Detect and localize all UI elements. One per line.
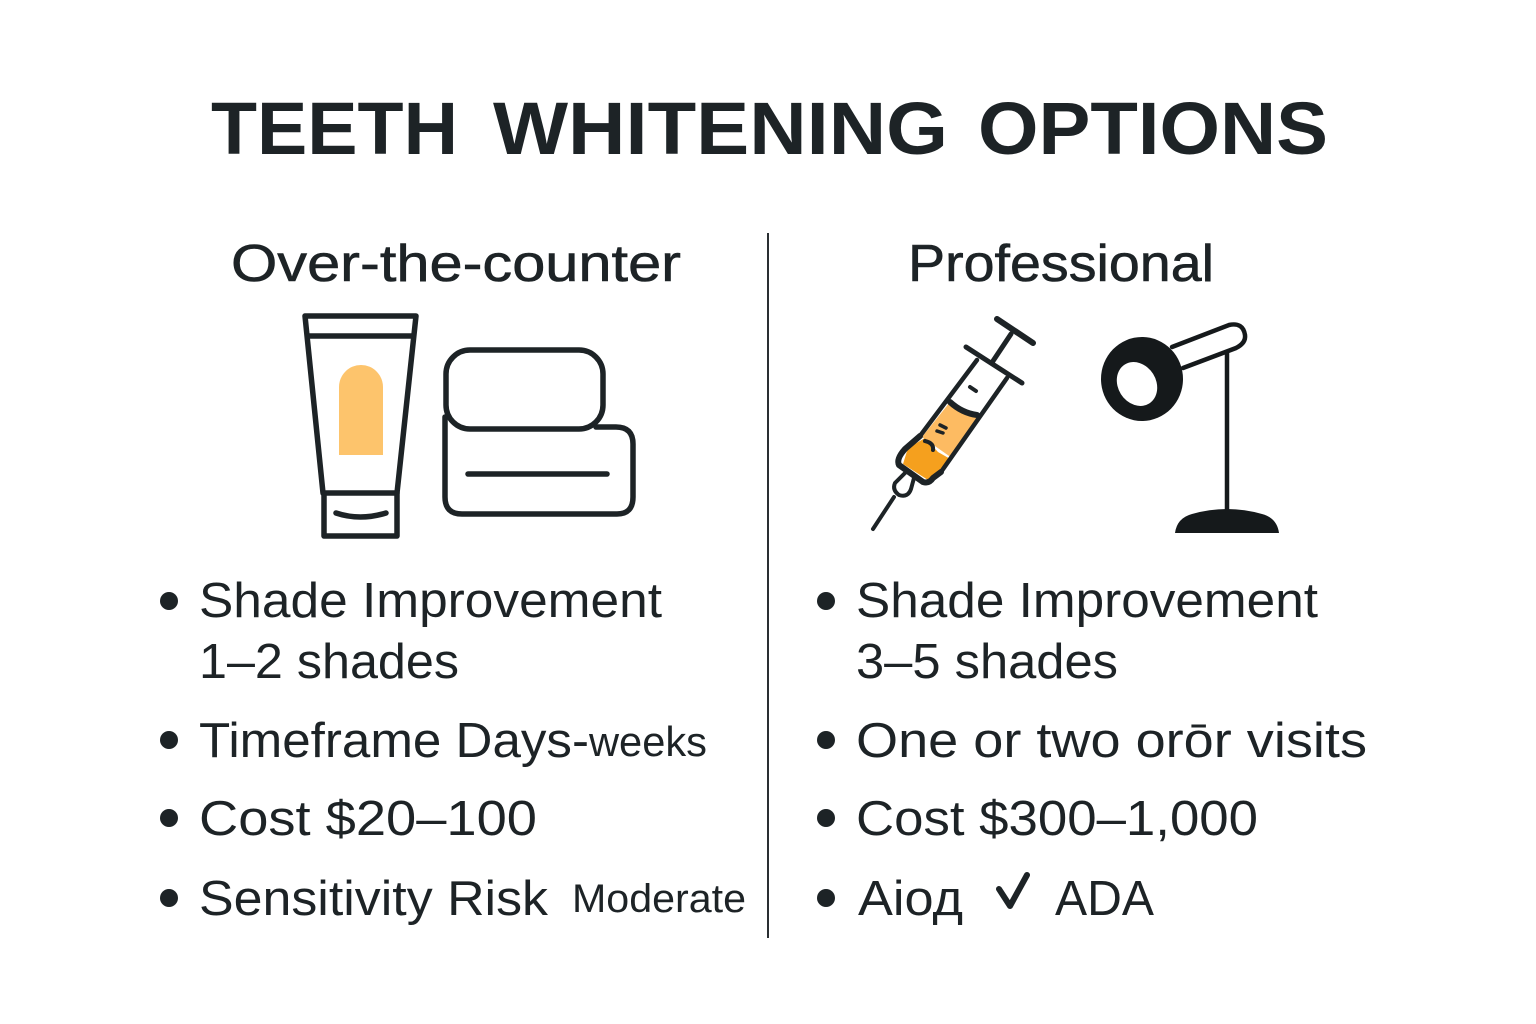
bullet list: professional — [817, 574, 1367, 926]
bullet: visits: One or two orōr visits — [856, 714, 1367, 768]
bullet: sensitivity risk — [160, 872, 746, 926]
bullet: timeframe — [160, 714, 707, 768]
bullet: cost: Cost $300–1,000 — [856, 792, 1258, 846]
bullet: timeframe: weeks — [588, 718, 707, 765]
bullet: ADA approval: Aiод — [858, 872, 963, 926]
title: WHITENING — [493, 87, 948, 170]
panel: over-the-counter — [160, 235, 746, 926]
icon: syringe — [873, 319, 1033, 529]
title — [211, 87, 1328, 170]
bullet: cost: Cost $20–100 — [199, 792, 537, 846]
bullet: shade improvement: 3–5 shades — [856, 635, 1118, 689]
heading: over-the-counter: Over-the-counter — [231, 235, 681, 293]
bullet: shade improvement: Shade Improvement — [856, 574, 1318, 628]
icon: whitening strips boxes — [445, 350, 633, 514]
title: OPTIONS — [978, 87, 1328, 170]
bullet: shade improvement — [817, 574, 1318, 689]
bullet list: over-the-counter — [160, 574, 746, 926]
bullet: sensitivity risk: Sensitivity Risk — [199, 872, 549, 926]
bullet: shade improvement: 1–2 shades — [199, 635, 459, 689]
bullet: shade improvement: Shade Improvement — [199, 574, 662, 628]
panel: professional — [817, 235, 1367, 926]
title: TEETH — [211, 87, 458, 170]
bullet: timeframe: Timeframe Days- — [199, 714, 589, 768]
bullet: sensitivity risk: Moderate — [572, 877, 746, 921]
center divider — [767, 233, 769, 938]
bullet: ADA approval: ADA — [1055, 872, 1154, 926]
heading: professional: Professional — [908, 235, 1214, 293]
bullet: shade improvement — [160, 574, 662, 689]
bullet: ADA approval — [817, 872, 1154, 926]
icon: whitening toothpaste tube — [305, 316, 416, 536]
icon: whitening lamp — [1101, 324, 1279, 533]
